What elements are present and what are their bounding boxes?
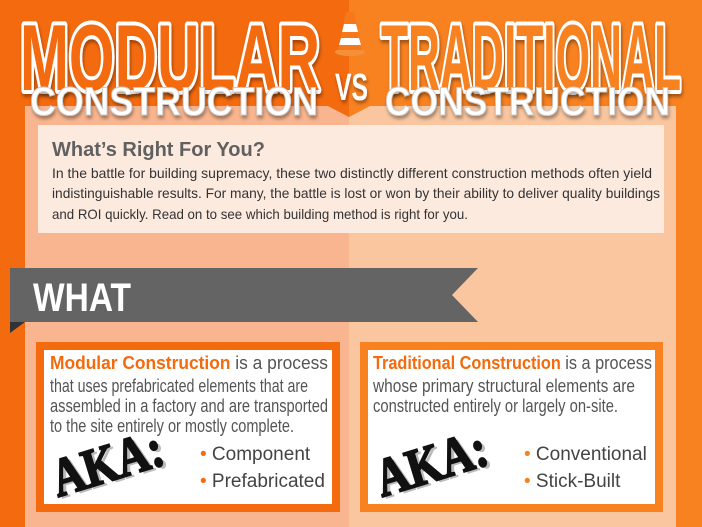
panel: traditional definition: whose primary structural elements are <box>372 376 635 396</box>
icon: traffic cone <box>335 12 365 56</box>
panel: modular definition: Modular Construction is a process <box>50 353 328 373</box>
aka list: • Prefabricated <box>200 471 325 492</box>
panel: modular definition <box>40 346 336 511</box>
intro text: and ROI quickly. Read on to see which building method is right for you. <box>52 206 468 222</box>
title: modular: MODULAR <box>20 5 320 110</box>
panel: traditional definition: Traditional Construction is a process <box>373 353 652 373</box>
aka list: • Conventional <box>524 444 647 465</box>
intro heading: What’s Right For You? <box>52 139 265 161</box>
panel: modular definition: that uses prefabricated elements that are <box>50 376 308 396</box>
panel: modular definition: assembled in a factory and are transported <box>50 396 328 416</box>
intro panel <box>38 125 664 233</box>
intro text: indistinguishable results. For many, the battle is lost or won by their ability to deliver quality buildings <box>52 185 660 201</box>
banner: what <box>10 268 478 333</box>
panel: traditional definition <box>364 346 659 511</box>
subtitle: construction right: CONSTRUCTION <box>385 80 670 124</box>
banner: what: WHAT <box>33 276 131 320</box>
aka list <box>200 444 325 492</box>
subtitle: construction left: CONSTRUCTION <box>30 80 318 124</box>
aka list: • Component <box>200 444 311 465</box>
aka label: AKA: <box>44 418 171 508</box>
title: modular <box>20 5 320 110</box>
aka list <box>524 444 647 492</box>
aka label: AKA: <box>48 420 174 510</box>
intro text: In the battle for building supremacy, these two distinctly different construction methods often yield <box>52 165 652 181</box>
aka label: AKA: <box>372 420 498 510</box>
panel: modular definition: to the site entirely or mostly complete. <box>50 416 294 436</box>
panel: traditional definition: constructed entirely or largely on-site. <box>373 396 618 416</box>
intro text <box>52 165 660 222</box>
aka list: • Stick-Built <box>524 471 621 492</box>
aka label: AKA: <box>368 418 495 508</box>
vs label: VS <box>335 67 368 109</box>
title: modular: MODULAR <box>20 5 320 110</box>
